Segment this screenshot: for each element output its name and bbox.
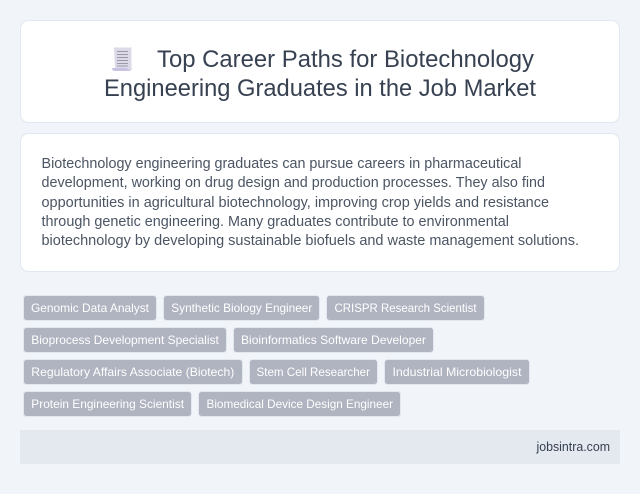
title: Top Career Paths for Biotechnology bbox=[157, 46, 535, 73]
description text: biotechnology by developing sustainable biofuels and waste management solutions. bbox=[42, 233, 579, 249]
tag: Bioinformatics Software Developer bbox=[234, 328, 434, 352]
tag: Protein Engineering Scientist bbox=[24, 392, 192, 416]
title: Engineering Graduates in the Job Market bbox=[104, 75, 536, 102]
tag: Regulatory Affairs Associate (Biotech): Regulatory Affairs Associate (Biotech) bbox=[31, 365, 234, 379]
tag: Stem Cell Researcher: Stem Cell Researcher bbox=[256, 365, 370, 379]
panel: description card bbox=[20, 134, 620, 272]
tag: Stem Cell Researcher bbox=[250, 360, 378, 384]
tag: Synthetic Biology Engineer bbox=[164, 296, 320, 320]
description text: opportunities in agricultural biotechnology, improving crop yields and resistance bbox=[42, 195, 549, 211]
tag: Bioprocess Development Specialist: Bioprocess Development Specialist bbox=[31, 333, 219, 347]
tag: Protein Engineering Scientist: Protein Engineering Scientist bbox=[31, 397, 185, 411]
footer source text: jobsintra.com bbox=[536, 440, 610, 454]
panel: footer bbox=[20, 430, 620, 464]
tag: Industrial Microbiologist: Industrial Microbiologist bbox=[392, 365, 522, 379]
tag: Regulatory Affairs Associate (Biotech) bbox=[24, 360, 242, 384]
title bbox=[104, 46, 536, 102]
tag: Synthetic Biology Engineer: Synthetic Biology Engineer bbox=[171, 301, 312, 315]
tag: Bioinformatics Software Developer: Bioinformatics Software Developer bbox=[241, 333, 426, 347]
tag: Genomic Data Analyst bbox=[24, 296, 156, 320]
tag: Bioprocess Development Specialist bbox=[24, 328, 226, 352]
tag: CRISPR Research Scientist bbox=[326, 296, 484, 320]
description text: through genetic engineering. Many graduates contribute to environmental bbox=[42, 214, 509, 230]
tag: Biomedical Device Design Engineer bbox=[198, 392, 400, 416]
tag: Industrial Microbiologist bbox=[384, 360, 530, 384]
tag: CRISPR Research Scientist: CRISPR Research Scientist bbox=[334, 301, 477, 315]
tag: Biomedical Device Design Engineer: Biomedical Device Design Engineer bbox=[206, 397, 393, 411]
description text bbox=[42, 156, 579, 249]
description text: development, working on drug design and production processes. They also find bbox=[42, 175, 545, 191]
panel: title card bbox=[20, 20, 620, 122]
tag: Genomic Data Analyst: Genomic Data Analyst bbox=[31, 301, 150, 315]
description text: Biotechnology engineering graduates can pursue careers in pharmaceutical bbox=[42, 156, 522, 172]
panel: career tags bbox=[24, 296, 530, 416]
icon: document scroll bbox=[112, 47, 132, 71]
